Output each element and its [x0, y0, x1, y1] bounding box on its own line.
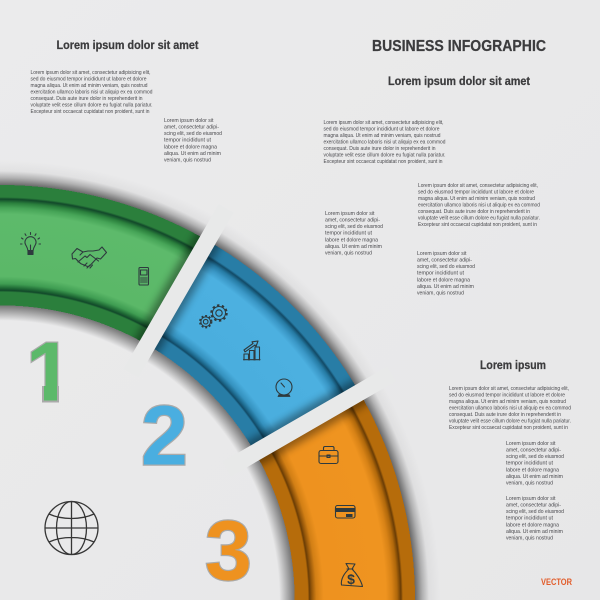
icon: mobile phone — [139, 268, 148, 285]
divider shadows — [132, 232, 368, 468]
text block: narrow right: scing elit, sed do eiusmod — [417, 264, 475, 270]
green segment — [0, 0, 346, 600]
text block: narrow top: aliqua. Ut enim ad minim — [164, 151, 221, 157]
text block: narrow right: veniam, quis nostrud — [417, 291, 464, 297]
text block: upper right — [418, 183, 540, 228]
title: BUSINESS INFOGRAPHIC — [372, 38, 546, 55]
heading: top right: Lorem ipsum dolor sit amet — [388, 76, 530, 88]
text block: lower right: Lorem ipsum dolor sit amet, consectetur adipisicing elit, — [449, 386, 569, 392]
text block: upper right: exercitation ullamco laboris nisi ut aliquip ex ea commod — [418, 202, 540, 208]
number 2: 2 — [141, 388, 188, 482]
text block: narrow lower 1: Lorem ipsum dolor sit — [506, 441, 556, 447]
text block: top left — [30, 70, 153, 115]
text block: narrow centre: aliqua. Ut enim ad minim — [325, 244, 382, 250]
text block: narrow lower 1: labore et dolore magna — [506, 467, 560, 473]
text block: top left: voluptate velit esse cillum dolore eu fugiat nulla pariatur. — [30, 103, 153, 109]
text block: narrow top: veniam, quis nostrud — [164, 158, 211, 164]
icon: clock — [276, 379, 292, 396]
number 1: 1 — [26, 325, 73, 419]
text block: narrow centre: veniam, quis nostrud — [325, 251, 372, 257]
text block: narrow top: amet, consectetur adipi- — [164, 124, 219, 130]
icon: bank card — [336, 506, 355, 518]
text block: upper right: Lorem ipsum dolor sit amet, consectetur adipisicing elit, — [418, 183, 538, 189]
text block: narrow centre — [325, 211, 383, 257]
text block: lower right: exercitation ullamco laboris nisi ut aliquip ex ea commod — [449, 405, 571, 411]
text block: narrow top: Lorem ipsum dolor sit — [164, 118, 214, 124]
text block: lower right: Excepteur sint occaecat cupidatat non proident, sunt in — [449, 425, 568, 431]
text block: top left: exercitation ullamco laboris nisi ut aliquip ex ea commod — [30, 89, 152, 95]
icon: money bag — [341, 564, 362, 587]
heading: lower right: Lorem ipsum — [480, 360, 546, 372]
text block: narrow centre: scing elit, sed do eiusmod — [325, 224, 383, 230]
text block: narrow lower 1: amet, consectetur adipi- — [506, 447, 561, 453]
text block: upper centre: exercitation ullamco laboris nisi ut aliquip ex ea commod — [324, 139, 446, 145]
text block: top left: Lorem ipsum dolor sit amet, consectetur adipisicing elit, — [30, 70, 151, 76]
divider: blue and orange — [223, 367, 396, 476]
text block: narrow centre: labore et dolore magna — [325, 237, 379, 243]
heading: top left: Lorem ipsum dolor sit amet — [56, 40, 199, 52]
text block: narrow lower 1: scing elit, sed do eiusmod — [506, 454, 564, 460]
text block: upper centre: voluptate velit esse cillum dolore eu fugiat nulla pariatur. — [324, 153, 446, 159]
text block: narrow lower 2: scing elit, sed do eiusmod — [506, 509, 564, 515]
text block: upper centre — [324, 120, 446, 165]
text block: narrow lower 2: Lorem ipsum dolor sit — [506, 496, 556, 502]
text block: lower right: voluptate velit esse cillum dolore eu fugiat nulla pariatur. — [449, 419, 571, 425]
text block: narrow lower 2: amet, consectetur adipi- — [506, 502, 561, 508]
text block: upper right: magna aliqua. Ut enim ad minim veniam, quis nostrud — [418, 196, 535, 202]
text block: narrow right: aliqua. Ut enim ad minim — [417, 284, 474, 290]
text block: top left: magna aliqua. Ut enim ad minim veniam, quis nostrud — [30, 83, 148, 89]
text block: lower right: consequat. Duis aute irure dolor in reprehenderit in — [449, 412, 561, 418]
text block: narrow lower 2 — [506, 496, 564, 542]
text block: upper right: voluptate velit esse cillum dolore eu fugiat nulla pariatur. — [418, 216, 540, 222]
text block: upper centre: Lorem ipsum dolor sit amet, consectetur adipisicing elit, — [324, 120, 444, 126]
text block: lower right: magna aliqua. Ut enim ad minim veniam, quis nostrud — [449, 399, 566, 405]
number 1 — [30, 342, 59, 402]
text block: narrow lower 2: aliqua. Ut enim ad minim — [506, 529, 563, 535]
orange segment — [0, 254, 600, 600]
icon: briefcase — [319, 446, 338, 464]
text block: top left: sed do eiusmod tempor incididunt ut labore et dolore — [30, 76, 146, 82]
text block: lower right: sed do eiusmod tempor incididunt ut labore et dolore — [449, 392, 565, 398]
text block: upper centre: magna aliqua. Ut enim ad minim veniam, quis nostrud — [324, 133, 440, 139]
text block: narrow lower 2: labore et dolore magna — [506, 522, 560, 528]
text block: narrow top: tempor incididunt ut — [164, 138, 211, 144]
icon: light bulb — [20, 232, 40, 254]
text block: narrow right: Lorem ipsum dolor sit — [417, 251, 467, 257]
text block: narrow lower 2: veniam, quis nostrud — [506, 536, 553, 542]
icon: handshake — [72, 247, 106, 268]
text block: upper right: consequat. Duis aute irure dolor in reprehenderit in — [418, 209, 530, 215]
text block: upper right: Excepteur sint occaecat cupidatat non proident, sunt in — [418, 222, 537, 228]
divider: green and blue — [124, 204, 233, 377]
text block: narrow right: tempor incididunt ut — [417, 271, 464, 277]
text block: narrow top — [164, 118, 222, 164]
icon: globe — [45, 502, 98, 554]
text block: narrow right: amet, consectetur adipi- — [417, 257, 472, 263]
text block: narrow top: scing elit, sed do eiusmod — [164, 131, 222, 137]
text block: narrow top: labore et dolore magna — [164, 144, 218, 150]
text block: upper right: sed do eiusmod tempor incididunt ut labore et dolore — [418, 189, 534, 195]
text block: narrow right: labore et dolore magna — [417, 277, 471, 283]
text block: narrow right — [417, 251, 475, 297]
text block: narrow lower 2: tempor incididunt ut — [506, 516, 553, 522]
icon: gears — [200, 305, 227, 328]
text block: top left: Excepteur sint occaecat cupidatat non proident, sunt in — [30, 109, 150, 115]
number 3: 3 — [205, 504, 252, 598]
text block: narrow centre: amet, consectetur adipi- — [325, 217, 380, 223]
icon: growth chart — [244, 341, 260, 360]
vector label: VECTOR — [541, 577, 572, 588]
text block: upper centre: sed do eiusmod tempor incididunt ut labore et dolore — [324, 126, 440, 132]
text block: narrow centre: Lorem ipsum dolor sit — [325, 211, 375, 217]
text block: top left: consequat. Duis aute irure dolor in reprehenderit in — [30, 96, 142, 102]
text block: upper centre: consequat. Duis aute irure dolor in reprehenderit in — [324, 146, 436, 152]
icon: money bag: $ — [347, 571, 355, 587]
text block: narrow lower 1: tempor incididunt ut — [506, 461, 553, 467]
text block: upper centre: Excepteur sint occaecat cupidatat non proident, sunt in — [324, 159, 442, 165]
text block: narrow lower 1: veniam, quis nostrud — [506, 481, 553, 487]
text block: narrow lower 1: aliqua. Ut enim ad minim — [506, 474, 563, 480]
text block: lower right — [449, 386, 571, 431]
text block: narrow lower 1 — [506, 441, 564, 487]
text block: narrow centre: tempor incididunt ut — [325, 231, 372, 237]
